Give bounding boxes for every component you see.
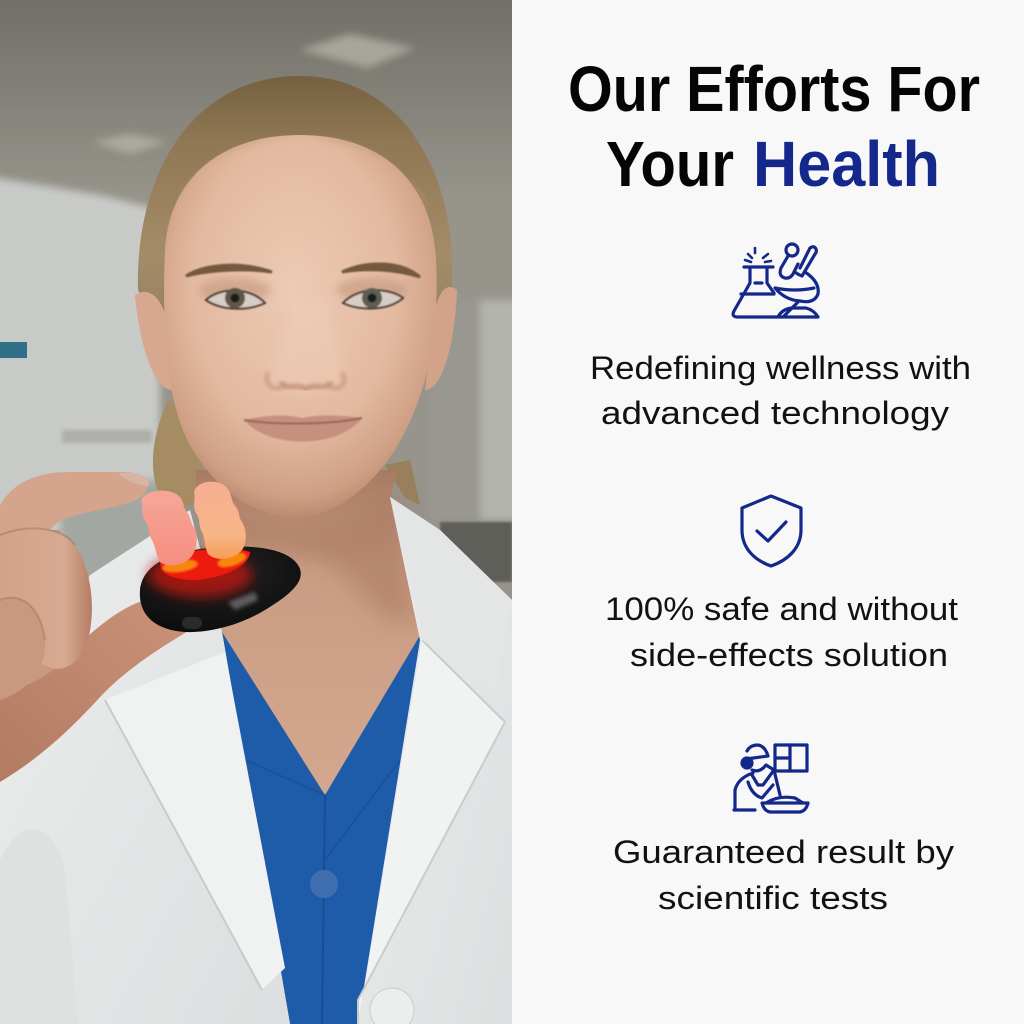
- text: safe solution: [605, 591, 958, 673]
- title: [568, 53, 980, 200]
- text: advanced technology: [590, 350, 971, 431]
- text: scientific tests: scientific tests: [658, 880, 888, 916]
- title: Your: [606, 128, 734, 200]
- hand: [0, 472, 190, 782]
- title: Our Efforts For: [568, 53, 980, 125]
- neck: [195, 470, 422, 795]
- eyebrows: [186, 264, 420, 277]
- text: scientific tests: [613, 834, 954, 916]
- right panel background: [512, 0, 1024, 1024]
- index finger: [0, 472, 148, 534]
- eyes: [206, 288, 403, 309]
- title: Health: [753, 128, 940, 200]
- lab coat: [0, 497, 512, 1024]
- icon: flask and microscope: [733, 244, 818, 317]
- middle finger: [0, 528, 92, 669]
- room background: [0, 0, 530, 620]
- photo: doctor holding device: [0, 0, 530, 1024]
- face: [135, 135, 457, 517]
- device: black base with red glow and two jelly pieces: [140, 482, 301, 632]
- smile: [244, 415, 362, 442]
- text: advanced technology: advanced technology: [601, 395, 949, 431]
- hand base: [26, 530, 60, 686]
- text: advanced technology: Redefining wellness with: [590, 350, 971, 386]
- eye shadows: [199, 278, 408, 302]
- icon: scientist at window: [734, 745, 808, 812]
- scrubs: [222, 632, 432, 1024]
- neck shadow: [242, 496, 414, 625]
- icon: shield with check: [742, 496, 801, 566]
- text: safe solution: 100% safe and without: [605, 591, 958, 627]
- nose: [264, 365, 347, 391]
- hair: [138, 76, 452, 512]
- thumb: [0, 600, 190, 782]
- ring finger: [0, 598, 45, 700]
- text: scientific tests: Guaranteed result by: [613, 834, 954, 870]
- text: safe solution: side-effects solution: [630, 637, 948, 673]
